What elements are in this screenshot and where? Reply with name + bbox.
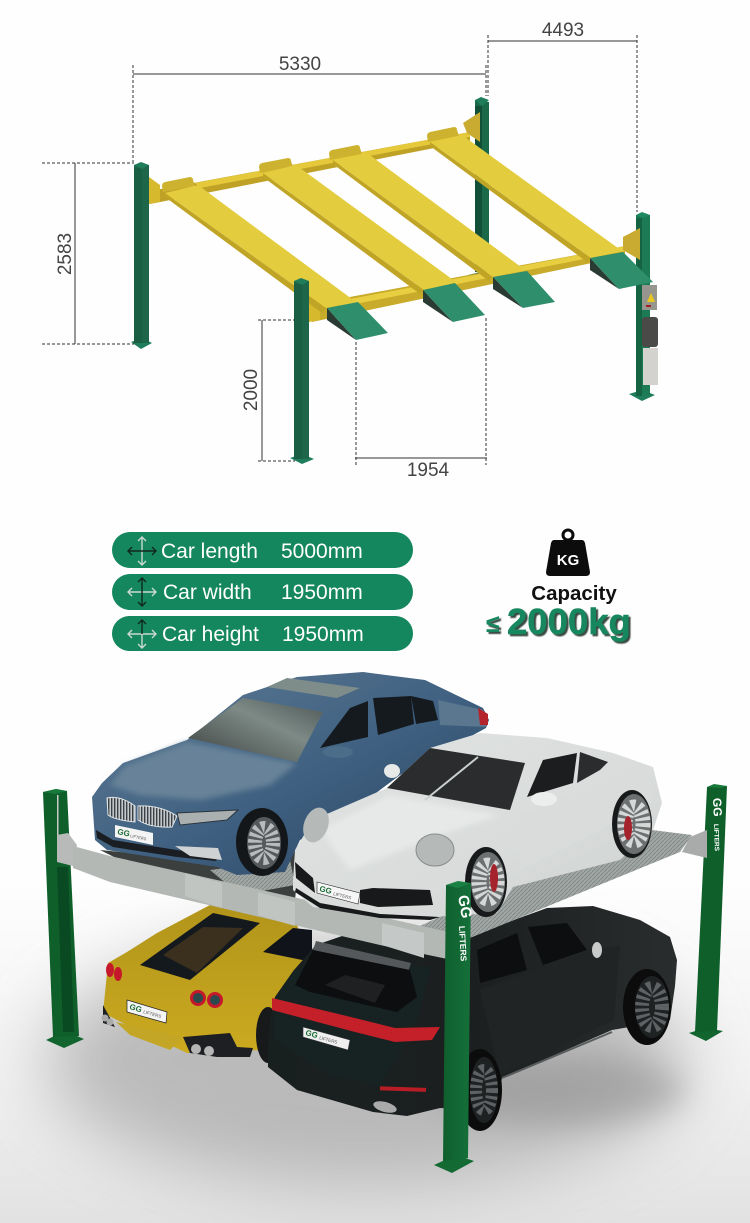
- yellow car: [102, 905, 312, 1063]
- plate 4: [427, 127, 622, 262]
- pill: car length: Car length: [161, 540, 258, 563]
- post: back right: [468, 97, 489, 280]
- door mirror: [592, 942, 602, 958]
- dimension: 2583: 2583: [55, 233, 76, 275]
- number plate: GG: [304, 1028, 319, 1040]
- bracket left: [57, 833, 77, 866]
- dimension: 2000: 2000: [241, 369, 262, 411]
- icon: width arrows: [128, 578, 156, 606]
- lower bumper: [96, 830, 218, 861]
- pill: car height: [112, 616, 413, 651]
- white sports car: [293, 733, 662, 920]
- capacity value: ≤: [486, 610, 500, 638]
- dimension: 5330: 5330: [279, 54, 321, 75]
- dimension: 2000: [241, 320, 295, 461]
- body: [268, 906, 677, 1116]
- door mirror: [323, 746, 353, 758]
- deck under blue car: [100, 850, 300, 905]
- photo: loaded parking lift: [43, 672, 727, 1185]
- bracket front: [309, 295, 320, 322]
- bracket right: [682, 830, 707, 858]
- side window: [263, 928, 312, 962]
- dimension: 4493: [488, 20, 637, 212]
- plate 1: [162, 177, 356, 313]
- motor: [642, 317, 658, 347]
- number plate: [127, 1000, 167, 1023]
- number plate: LIFTERS: [130, 833, 147, 841]
- number plate: [115, 825, 153, 845]
- front grille: [295, 862, 440, 920]
- headlights: [416, 834, 454, 866]
- number plate: LIFTERS: [143, 1009, 162, 1019]
- floor shadows: [45, 935, 685, 1185]
- pill: car length: [112, 532, 413, 568]
- front wheel: [465, 847, 507, 917]
- post logo: GG: [710, 798, 725, 817]
- post logo: [710, 798, 725, 852]
- post: right with power unit: [629, 212, 658, 401]
- dimension: 4493: 4493: [542, 20, 584, 41]
- wheel rear: [623, 969, 671, 1045]
- post logo: LIFTERS: [712, 824, 720, 852]
- yellow platform frame: [149, 112, 653, 340]
- rear deck highlight: [438, 700, 486, 727]
- icon: KG weight: KG: [557, 552, 579, 569]
- oil tank: [643, 348, 658, 385]
- spoiler: [313, 941, 411, 972]
- rear tyre: [256, 1007, 280, 1063]
- dimension: 5330: [133, 54, 486, 162]
- pill: car length: 5000mm: [281, 540, 363, 563]
- post: front: [290, 278, 314, 464]
- plate 2: [259, 158, 456, 294]
- side windows: [527, 753, 577, 797]
- post logo: LIFTERS: [457, 926, 469, 962]
- icon: KG weight: [546, 530, 590, 576]
- control box: [642, 285, 657, 310]
- post: rear left: [131, 162, 152, 349]
- bracket back: [463, 112, 480, 142]
- mirror: [531, 792, 557, 806]
- dimension: 1954: [355, 318, 487, 481]
- pill: car width: Car width: [163, 581, 252, 604]
- black suv: [268, 906, 677, 1131]
- ramp 4: [590, 252, 653, 289]
- front cross beam: [312, 246, 625, 322]
- panel: car size limits: [112, 532, 413, 651]
- rear window: [140, 913, 260, 980]
- hood highlights: [320, 795, 500, 870]
- wheel: [236, 808, 288, 876]
- ramp 1: [327, 302, 388, 340]
- bracket left: [149, 177, 160, 204]
- back cross beam: [150, 132, 470, 204]
- icon: height arrows: [128, 620, 156, 648]
- icon: length arrows: [128, 537, 156, 565]
- lift deck: [57, 830, 707, 962]
- headlight: [177, 810, 238, 825]
- rear wheel: [612, 790, 652, 858]
- body: [293, 733, 662, 917]
- panel: capacity: [486, 530, 631, 642]
- ramp 2: [423, 283, 485, 322]
- post: front: [434, 881, 475, 1173]
- post logo: [454, 894, 475, 962]
- dimension: 2583: [42, 163, 134, 344]
- exhaust: [191, 1044, 201, 1054]
- post: rear right: [689, 784, 727, 1041]
- side windows: [477, 933, 527, 983]
- door panel: [520, 770, 655, 870]
- number plate: [317, 882, 360, 904]
- technical lift drawing with dimensions: [42, 20, 658, 481]
- side windows: [320, 701, 368, 748]
- number plate: GG: [128, 1002, 143, 1014]
- post: rear left: [43, 789, 84, 1048]
- front beam: [73, 846, 462, 962]
- dimension: 1954: 1954: [407, 460, 450, 481]
- ramp 3: [493, 271, 555, 308]
- deck mesh right: [420, 830, 692, 938]
- windshield: [188, 698, 323, 762]
- sunroof: [267, 678, 360, 698]
- post logo: GG: [454, 894, 475, 920]
- lower taillight: [380, 1086, 426, 1092]
- taillights: [190, 990, 206, 1006]
- door highlight: [480, 945, 620, 1075]
- exhaust: [372, 1099, 398, 1115]
- number plate: GG: [117, 827, 131, 839]
- number plate: LIFTERS: [333, 891, 352, 900]
- body: [92, 672, 489, 875]
- body: [103, 905, 310, 1053]
- windshield: [387, 748, 525, 810]
- blue sedan: [92, 672, 489, 876]
- kidney grille: [107, 797, 177, 827]
- pill: car height: Car height: [162, 623, 259, 646]
- blocks: [185, 873, 222, 908]
- pill: car height: 1950mm: [282, 623, 364, 646]
- hood highlight: [110, 742, 297, 800]
- diffuser: [183, 1033, 253, 1057]
- pill: car width: [112, 574, 413, 610]
- pill: car width: 1950mm: [281, 581, 363, 604]
- taillight band: [272, 998, 440, 1042]
- capacity label: Capacity: [531, 582, 617, 605]
- number plate: [303, 1027, 350, 1050]
- taillight: [478, 708, 488, 725]
- number plate: LIFTERS: [319, 1035, 338, 1045]
- sill: [502, 1032, 612, 1078]
- wheel front: [458, 1049, 502, 1131]
- capacity value: 2000kg: [507, 601, 631, 642]
- rear tailgate: [275, 965, 431, 1085]
- plate 3: [329, 145, 525, 281]
- rear window: [295, 950, 417, 1012]
- bracket right: [623, 228, 640, 260]
- number plate: GG: [319, 884, 333, 896]
